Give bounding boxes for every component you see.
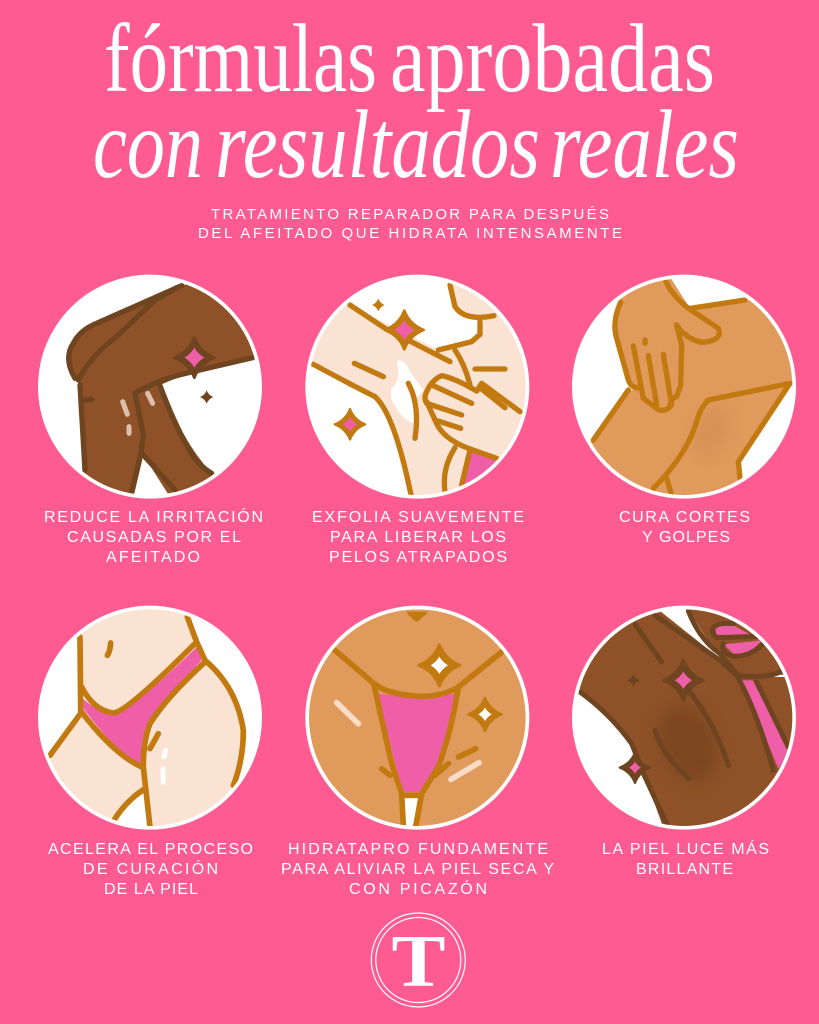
title <box>93 5 739 199</box>
caption: CAUSADAS POR EL <box>67 529 241 546</box>
icon: knee dark skin <box>38 275 270 505</box>
caption: HIDRATAPRO FUNDAMENTE <box>288 841 548 858</box>
caption: PARA ALIVIAR LA PIEL SECA Y <box>281 861 554 878</box>
panel: heals cuts <box>572 272 800 546</box>
caption: AFEITADO <box>106 549 200 566</box>
icon: bikini area tan skin <box>305 606 529 830</box>
caption: DE LA PIEL <box>104 881 198 898</box>
caption: ACELERA EL PROCESO <box>48 841 253 858</box>
panel: gentle exfoliation <box>302 275 535 566</box>
title: fórmulas <box>104 5 377 113</box>
caption: Y GOLPES <box>642 529 730 546</box>
caption: REDUCE LA IRRITACIÓN <box>44 507 263 526</box>
caption: CON PICAZÓN <box>349 879 487 898</box>
caption: PARA LIBERAR LOS <box>330 529 506 546</box>
icon: hand rubbing light skin <box>302 275 535 499</box>
icon: hip with pink underwear <box>38 604 263 837</box>
caption: DE CURACIÓN <box>83 859 218 878</box>
panel: brighter skin <box>570 604 800 878</box>
caption: PELOS ATRAPADOS <box>329 549 507 566</box>
panel: reduce irritation <box>38 275 270 566</box>
caption: EXFOLIA SUAVEMENTE <box>312 509 524 526</box>
title: aprobadas <box>390 5 715 113</box>
subtitle <box>198 206 622 242</box>
caption: LA PIEL LUCE MÁS <box>602 839 769 858</box>
subtitle: DEL AFEITADO QUE HIDRATA INTENSAMENTE <box>198 225 622 242</box>
caption <box>602 839 769 878</box>
logo: T <box>392 921 446 1003</box>
caption <box>44 507 263 566</box>
title: reales <box>550 91 739 199</box>
caption <box>619 509 750 546</box>
caption <box>48 841 253 898</box>
subtitle: TRATAMIENTO REPARADOR PARA DESPUÉS <box>211 206 609 223</box>
panel: deep hydration <box>281 606 554 898</box>
caption <box>281 841 554 898</box>
caption <box>312 509 524 566</box>
caption: BRILLANTE <box>636 861 733 878</box>
title: con <box>93 91 203 199</box>
icon: underarm dark skin <box>570 604 800 837</box>
panel: speeds healing <box>38 604 263 898</box>
logo <box>371 913 465 1007</box>
title: resultados <box>215 91 540 199</box>
caption: CURA CORTES <box>619 509 750 526</box>
icon: hand on thigh tan skin <box>572 272 800 505</box>
